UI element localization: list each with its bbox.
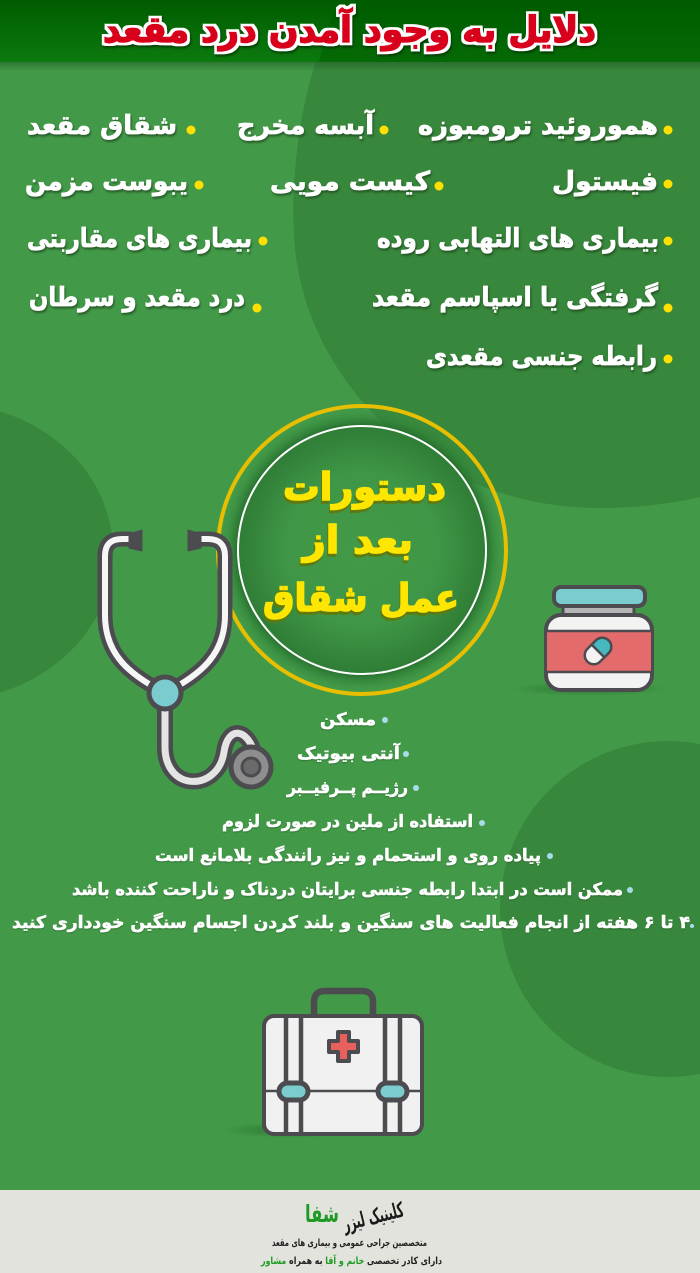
cause: cancer: درد مقعد و سرطان [29, 283, 245, 313]
heading line 2: بعد از [301, 518, 413, 562]
cause: thrombosed hemorrhoid: هموروئید ترومبوزه [418, 111, 658, 141]
heading line 1: دستورات [283, 465, 446, 509]
circle badge [218, 406, 506, 694]
heading line 3: عمل شقاق [263, 576, 459, 620]
instruction: high-fibre diet: رژیــم پــرفیــبر [286, 778, 408, 798]
icon: first aid kit [220, 991, 422, 1138]
logo: clinic name: کلینیک لیزر [339, 1197, 407, 1236]
instruction: laxative: استفاده از ملین در صورت لزوم [222, 812, 473, 832]
footer line 2: دارای کادر تخصصی خانم و آقا به همراه مشاور [260, 1254, 442, 1267]
list: post-surgery instructions [12, 710, 690, 933]
cause: anal abscess: آبسه مخرج [237, 109, 375, 141]
badge heading [263, 465, 459, 620]
cause: pilonidal cyst: کیست مویی [270, 167, 431, 197]
clinic logo [305, 1197, 407, 1236]
cause: chronic constipation: یبوست مزمن [25, 167, 188, 197]
footer line 1: متخصصین جراحی عمومی و بیماری های مقعد [272, 1238, 427, 1249]
cause: anal spasm: گرفتگی یا اسپاسم مقعد [372, 282, 659, 313]
instruction: antibiotic: آنتی بیوتیک [297, 742, 401, 764]
footer [0, 1190, 700, 1273]
cause: anal fissure: شقاق مقعد [27, 111, 177, 141]
instruction: avoid heavy lifting: ‏۴ تا ۶ هفته از انجام فعالیت های سنگین و بلند کردن اجسام سنگین خودداری کنید [12, 912, 690, 933]
title: دلایل به وجود آمدن درد مقعد [103, 7, 596, 51]
icon: stethoscope [105, 530, 271, 787]
yellow bullets [186, 126, 672, 364]
icon: pill jar [510, 587, 670, 696]
instruction: intercourse: ممکن است در ابتدا رابطه جنسی برایتان دردناک و ناراحت کننده باشد [72, 880, 623, 900]
cause: inflammatory bowel disease: بیماری های التهابی روده [377, 224, 659, 254]
instruction: painkiller: مسکن [320, 710, 376, 730]
list: causes of pain [25, 109, 659, 372]
header band [0, 0, 700, 71]
light blue bullets [382, 717, 694, 928]
cause: anal intercourse: رابطه جنسی مقعدی [426, 342, 657, 372]
instruction: walking and bathing: پیاده روی و استحمام و نیز رانندگی بلامانع است [155, 845, 541, 866]
cause: sexually transmitted disease: بیماری های مقاربتی [27, 224, 252, 254]
logo: clinic name accent: شفا [305, 1199, 339, 1228]
cause: fistula: فیستول [552, 167, 658, 197]
